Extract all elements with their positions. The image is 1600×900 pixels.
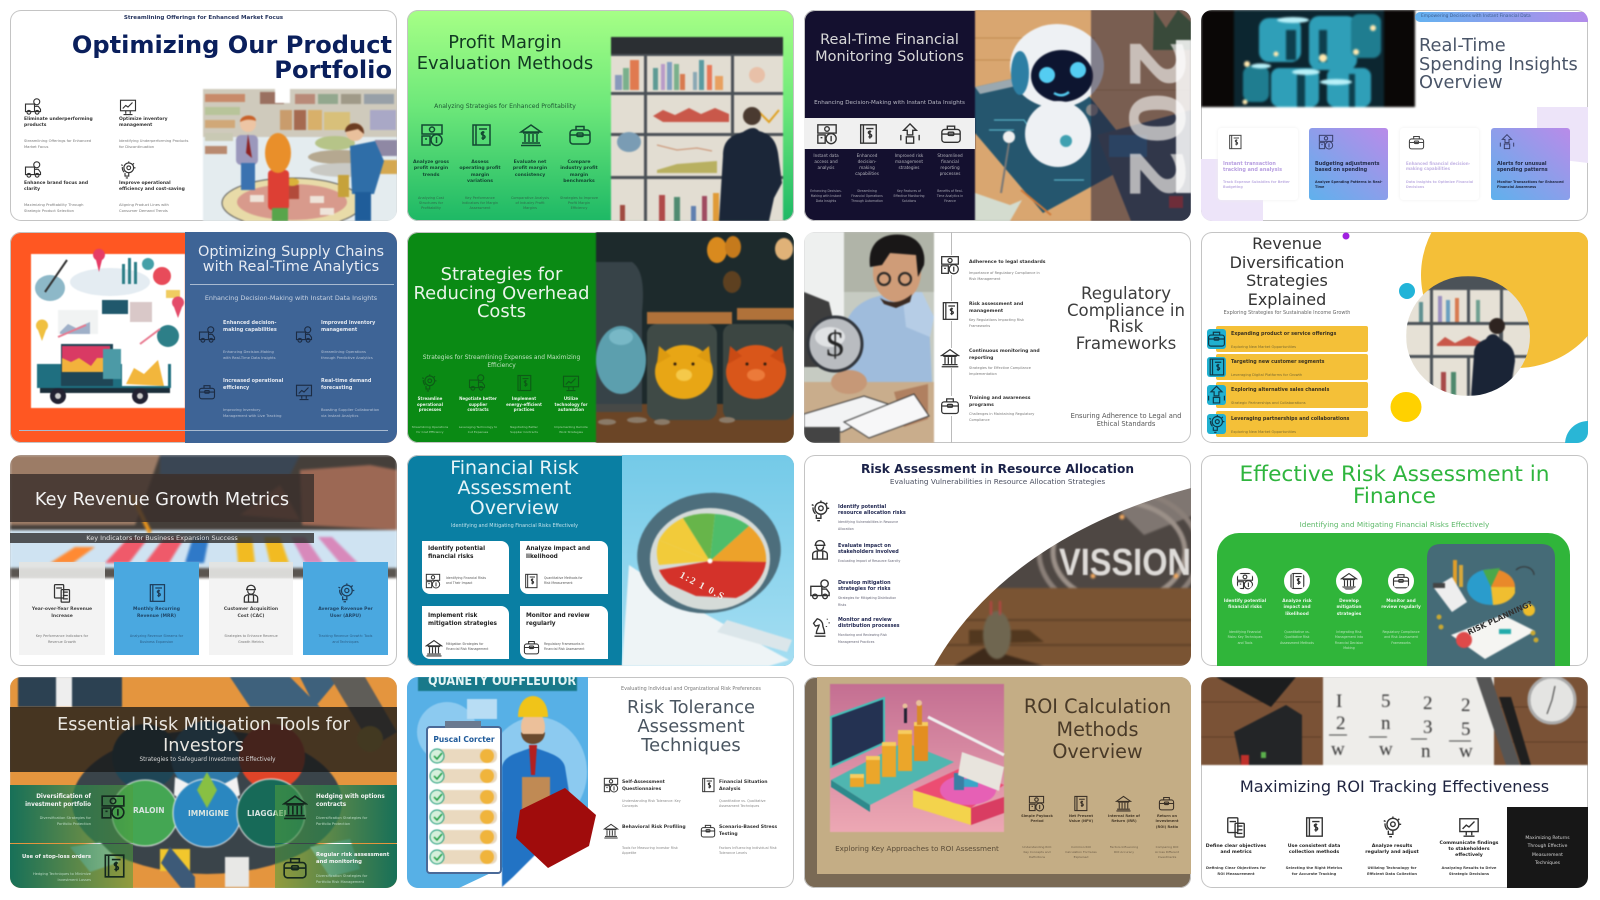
column labels: Streamline operational processes	[417, 396, 443, 412]
slide subtitle: Strategies to Safeguard Investments Effectively	[139, 757, 276, 763]
illustration: inspector with checklist	[407, 677, 596, 888]
list item 2: Leveraging Digital Platforms for Growth	[1231, 373, 1302, 377]
column labels: Internal Rate of Return (IRR)	[1108, 814, 1140, 823]
column labels: Leveraging Technology to Cut Expenses	[459, 425, 497, 434]
item: stakeholder impact: Evaluating Impact of Resource Scarcity	[838, 559, 900, 563]
card: alerts: Alerts for unusual spending patterns	[1497, 161, 1548, 173]
panel: financial monitoring slide	[804, 10, 1191, 221]
risk card 3: Implement risk mitigation strategies	[428, 613, 497, 627]
risk card 4	[520, 606, 608, 659]
risk card 3	[422, 606, 509, 659]
image: glowing glass jars	[1201, 10, 1417, 109]
column labels: Defining Clear Objectives for ROI Measurement	[1206, 866, 1266, 876]
column labels	[412, 396, 588, 434]
image: desk with calculator and handwritten figures: I	[1336, 691, 1342, 712]
image: desk with calculator and handwritten figures: 3	[1423, 717, 1432, 738]
technique: self assessment	[604, 778, 681, 808]
column labels: Identifying Financial Risks: Key Techniques and Tools	[1228, 630, 1262, 645]
item: brand focus: Enhance brand focus and clarity	[24, 181, 88, 192]
item: optimize inventory: Identifying Underperforming Products for Discontinuation	[119, 139, 188, 148]
item: monitoring	[940, 348, 1040, 376]
item: decision making: Enhancing Decision-Making with Real-Time Data Insights	[223, 350, 276, 360]
slide subtitle: Identifying and Mitigating Financial Risks Effectively	[1300, 520, 1489, 529]
item: training: Training and awareness programs	[969, 396, 1031, 408]
item: efficiency	[198, 378, 283, 418]
metric card: MRR: Monthly Recurring Revenue (MRR)	[133, 607, 180, 619]
column labels: Selecting the Right Metrics for Accurate Tracking	[1286, 866, 1342, 876]
list item 4: Leveraging partnerships and collaborations	[1231, 417, 1349, 422]
column labels: Streamlining Operations for Cost Efficiency	[412, 425, 448, 434]
slide title: Profit Margin Evaluation Methods	[417, 32, 593, 74]
slide title: Risk Assessment in Resource Allocation	[861, 462, 1134, 476]
title band	[10, 474, 314, 522]
slide title: Optimizing Supply Chains with Real-Time Analytics	[198, 244, 384, 275]
illustration: inspector with checklist: Puscal Corcter	[433, 735, 495, 744]
list item 1: Exploring New Market Opportunities	[1231, 345, 1296, 349]
column labels: Communicate findings to stakeholders effectively	[1440, 841, 1498, 858]
column labels: Define clear objectives and metrics	[1206, 844, 1266, 855]
metric card: MRR: Analyzing Revenue Streams for Business Expansion	[130, 634, 183, 644]
image: risk gauge under lens: 1:2 1 0.S	[678, 570, 727, 603]
metric card: ARPU	[303, 562, 388, 655]
metric card: YoY revenue: Key Performance Indicators for Revenue Growth	[36, 634, 88, 644]
panel: spending insights slide	[1201, 10, 1588, 221]
item: risk assessment: Risk assessment and management	[969, 302, 1023, 314]
slide subtitle: Exploring Key Approaches to ROI Assessment	[835, 844, 999, 853]
card: instant tracking: Instant transaction tracking and analysis	[1223, 161, 1282, 173]
image: desk with calculator and handwritten figures: n	[1421, 741, 1431, 762]
image: piggy banks in jars	[595, 232, 794, 443]
risk card 1: Identifying Financial Risks and Their Impact	[446, 576, 486, 585]
timeline divider	[951, 232, 952, 443]
blue text panel	[185, 232, 397, 443]
item: brand focus: Maximizing Profitability Through Strategic Product Selection	[24, 203, 83, 212]
slide subtitle: Identifying and Mitigating Financial Risks Effectively	[451, 523, 578, 529]
card: alerts: Monitor Transactions for Enhanced Financial Awareness	[1497, 180, 1564, 189]
subtitle pill: Empowering Decisions with Instant Financial Data	[1421, 14, 1531, 19]
list item 1	[1216, 326, 1368, 352]
tool: regular assessment	[275, 844, 397, 888]
column labels	[413, 160, 598, 210]
column labels: Use consistent data collection methods	[1288, 844, 1340, 855]
card: budgeting adjustments: Budgeting adjustments based on spending	[1315, 161, 1380, 173]
tool: hedging	[275, 785, 397, 843]
card: budgeting adjustments	[1309, 128, 1388, 200]
column labels: Common ROI Calculation Formulas Explained	[1065, 845, 1097, 859]
panel: profit margin slide	[407, 10, 794, 221]
technique: stress testing: Scenario-Based Stress Testing	[719, 825, 777, 837]
image: desk with calculator and handwritten figures: w	[1331, 739, 1345, 760]
item: monitoring: Strategies for Effective Compliance Implementation	[969, 366, 1031, 376]
tool: hedging: Hedging with options contracts	[316, 794, 385, 808]
item: identify risks	[812, 500, 906, 531]
subtitle band	[10, 533, 314, 543]
metric card: ARPU: Average Revenue Per User (ARPU)	[318, 607, 373, 619]
item: inventory	[296, 320, 376, 360]
slide title: ROI Calculation Methods Overview	[1024, 695, 1171, 763]
item: legal standards: Adherence to legal standards	[969, 260, 1046, 265]
item: inventory: Streamlining Operations through Predictive Analytics	[321, 350, 373, 360]
venn labels	[133, 806, 287, 818]
image: analyst at chart wall	[610, 36, 784, 221]
technique: financial situation	[702, 778, 768, 808]
card: instant tracking	[1218, 128, 1298, 200]
black sidebar	[1507, 807, 1588, 888]
panel: overhead costs slide	[407, 232, 794, 443]
top subtitle: Evaluating Individual and Organizational Risk Preferences	[621, 686, 761, 692]
metric card: MRR	[114, 562, 199, 655]
item: mitigation strategies: Strategies for Mitigating Distribution Risks	[838, 596, 896, 607]
image: logistics illustration	[30, 248, 185, 409]
item: identify risks: Identifying Vulnerabilities in Resource Allocation	[838, 520, 898, 531]
item: monitor distribution: Monitor and review distribution processes	[838, 617, 900, 629]
item: training: Challenges in Maintaining Regulatory Compliance	[969, 412, 1034, 422]
column labels: Utilizing Technology for Efficient Data Collection	[1367, 866, 1417, 876]
subtitle pill	[1415, 12, 1588, 22]
venn labels: RALOIN	[133, 806, 165, 815]
column labels: Strategies to Improve Profit Margin Efficiency	[560, 196, 598, 210]
venn labels: LIAGGAEI	[247, 809, 287, 818]
item: decision making	[198, 320, 277, 360]
column labels	[1224, 598, 1421, 650]
slide title: Maximizing ROI Tracking Effectiveness	[1240, 777, 1549, 796]
item: inventory: Improved inventory management	[321, 320, 375, 333]
item: eliminate products: Streamlining Offerings for Enhanced Market Focus	[24, 139, 91, 148]
slide title: Real-Time Spending Insights Overview	[1419, 35, 1578, 93]
image: meeting table with venn diagram	[10, 677, 397, 888]
panel: supply chains slide	[10, 232, 397, 443]
list item 4	[1216, 411, 1368, 437]
column labels: Utilize technology for automation	[555, 396, 587, 412]
panel: risk tolerance slide	[407, 677, 794, 888]
risk card 1	[422, 541, 509, 594]
column labels: Analyze risk impact and likelihood	[1282, 599, 1312, 617]
item: operational efficiency: Aligning Product Lines with Consumer Demand Trends	[119, 203, 169, 212]
list item 3: Strategic Partnerships and Collaborations	[1231, 401, 1306, 405]
image: vision wall and wooden desk	[934, 488, 1191, 666]
panel: effective risk assessment slide	[1201, 455, 1588, 666]
item: stakeholder impact: Evaluate impact on stakeholders involved	[838, 543, 899, 555]
column labels: Streamlined financial reporting processes	[937, 153, 963, 176]
column labels: Analyzing Cost Structures for Profitability	[418, 196, 444, 210]
technique: financial situation: Financial Situation Analysis	[719, 780, 768, 792]
column labels: Enhanced decision- making capabilities	[855, 153, 879, 176]
subtitle band: Key Indicators for Business Expansion Success	[86, 534, 238, 542]
risk card 2: Quantitative Methods for Risk Measurement	[544, 576, 583, 585]
technique: self assessment: Understanding Risk Tolerance: Key Concepts	[622, 799, 681, 808]
card: enhanced decisions	[1400, 128, 1479, 200]
column labels: Return on Investment (ROI) Ratio	[1156, 814, 1178, 829]
image: desk with calculator and handwritten figures: w	[1379, 739, 1393, 760]
icon row	[421, 124, 591, 146]
item: efficiency: Improving Inventory Management with Live Tracking	[223, 408, 282, 418]
image: analyst with magnifier: $	[826, 324, 844, 364]
column labels: Comparing ROI Across Different Investments	[1155, 845, 1179, 859]
panel: resource allocation slide	[804, 455, 1191, 666]
metric card: CAC: Strategies to Enhance Revenue Growth Metrics	[224, 634, 278, 644]
item: operational efficiency: Improve operational efficiency and cost-saving	[119, 181, 185, 192]
list item 3: Exploring alternative sales channels	[1231, 388, 1329, 393]
tan background panel	[817, 677, 1191, 874]
item: demand forecasting: Real-time demand forecasting	[321, 378, 371, 391]
panel: financial risk overview slide	[407, 455, 794, 666]
column labels: Regulatory Compliance and Risk Assessment Frameworks	[1382, 630, 1420, 645]
slide subtitle: Ensuring Adherence to Legal and Ethical Standards	[1071, 412, 1181, 428]
item: mitigation strategies	[810, 579, 896, 607]
item: monitoring: Continuous monitoring and reporting	[969, 349, 1040, 361]
slide title: Risk Tolerance Assessment Techniques	[627, 697, 755, 756]
image: risk gauge under lens	[621, 455, 794, 666]
decorative blobs	[1201, 107, 1588, 221]
card: alerts	[1491, 128, 1570, 200]
column labels: Implementing Remote Work Strategies	[554, 425, 588, 434]
metric card: ARPU: Tracking Revenue Growth: Tools and Techniques	[319, 634, 372, 644]
slide title: Financial Risk Assessment Overview	[450, 457, 579, 519]
column labels: Evaluate net profit margin consistency	[513, 160, 547, 178]
column labels: Integrating Risk Management into Financial Decision Making	[1335, 630, 1363, 650]
tool: hedging: Diversification Strategies for Portfolio Protection	[316, 816, 367, 826]
item: training	[941, 396, 1034, 422]
metric card: CAC: Customer Acquisition Cost (CAC)	[224, 607, 278, 619]
item: decision making: Enhanced decision- making capabilities	[223, 320, 277, 333]
technique: self assessment: Self-Assessment Questionnaires	[622, 780, 665, 792]
tool: stop-loss	[10, 844, 133, 888]
column labels: Quantitative vs. Qualitative Risk Assessment Methods	[1280, 630, 1314, 645]
item: legal standards	[941, 255, 1046, 281]
slide subtitle: Strategies for Streamlining Expenses and Maximizing Efficiency	[423, 355, 580, 369]
column labels: Comparative Analysis of Industry Profit Margins	[511, 196, 549, 210]
slide subtitle: Exploring Strategies for Sustainable Income Growth	[1224, 310, 1350, 316]
title band: Key Revenue Growth Metrics	[35, 490, 289, 510]
image: risk planning desk	[1427, 544, 1555, 666]
column labels: Simple Payback Period	[1021, 814, 1053, 823]
column labels: Negotiating Better Supplier Contracts	[510, 425, 538, 434]
technique: financial situation: Quantitative vs. Qualitative Assessment Techniques	[719, 799, 766, 808]
slide subtitle: Streamlining Offerings for Enhanced Market Focus	[124, 15, 283, 21]
tool: diversification: Diversification Strategies for Portfolio Protection	[40, 816, 91, 826]
image: isometric chart with climbers	[804, 677, 1191, 888]
slide title: Effective Risk Assessment in Finance	[1239, 462, 1550, 509]
item: identify risks: Identify potential resource allocation risks	[838, 504, 906, 516]
risk card 4: Regulatory Frameworks in Financial Risk Assessment	[544, 642, 584, 651]
slide title: Real-Time Financial Monitoring Solutions	[815, 32, 964, 65]
item: demand forecasting: Boosting Supplier Collaboration via Instant Analytics	[321, 408, 379, 418]
image: desk with calculator and handwritten figures: 5	[1381, 691, 1390, 712]
item: monitor distribution: Monitoring and Reviewing Risk Management Practices	[838, 633, 887, 644]
list item 3	[1216, 382, 1368, 408]
column labels: Implement energy-efficient practices	[506, 396, 542, 412]
image: analyst with magnifier	[804, 232, 935, 443]
metric card: YoY revenue: Year-over-Year Revenue Increase	[32, 607, 92, 619]
image: desk with calculator and handwritten figures: w	[1459, 741, 1473, 762]
image: desk with calculator and handwritten figures: 2	[1461, 695, 1470, 716]
column labels: Negotiate better supplier contracts	[459, 396, 497, 412]
column labels: Instant data access and analysis	[813, 153, 839, 170]
icon circles	[1232, 568, 1414, 594]
image: desk with calculator and handwritten figures: 2	[1336, 713, 1346, 734]
column labels: Understanding ROI: Key Concepts and Definitions	[1022, 845, 1052, 859]
list item 2	[1216, 354, 1368, 380]
slide subtitle: Evaluating Vulnerabilities in Resource Allocation Strategies	[890, 477, 1105, 486]
item: risk assessment	[942, 301, 1024, 328]
venn labels: IMMIGINE	[188, 809, 229, 818]
tool: diversification: Diversification of investment portfolio	[25, 794, 91, 808]
column labels: Key Features of Effective Monitoring Solutions	[893, 189, 925, 203]
panel: revenue diversification slide	[1201, 232, 1588, 443]
slide subtitle: Enhancing Decision-Making with Instant Data Insights	[814, 100, 965, 106]
item: mitigation strategies: Develop mitigation strategies for risks	[838, 580, 891, 592]
column labels	[1201, 841, 1507, 887]
technique: behavioral profiling: Behavioral Risk Profiling	[622, 825, 686, 830]
item: operational efficiency	[119, 161, 185, 212]
panel: revenue metrics slide	[10, 455, 397, 666]
item: optimize inventory: Optimize inventory management	[119, 117, 168, 128]
icon band	[804, 118, 975, 149]
risk card 2	[520, 541, 608, 594]
panel: risk mitigation tools slide	[10, 677, 397, 888]
icon row	[1201, 814, 1507, 838]
image: desk with calculator and handwritten figures	[1201, 677, 1588, 888]
slide title: Regulatory Compliance in Risk Frameworks	[1067, 284, 1185, 353]
image: risk planning desk: RISK PLANNING?	[1466, 599, 1534, 637]
column labels: Improved risk management strategies	[895, 153, 923, 170]
column labels: Monitor and review regularly	[1381, 599, 1421, 610]
black sidebar: Maximizing Returns Through Effective Measurement Techniques	[1525, 836, 1570, 866]
technique: stress testing: Factors Influencing Individual Risk Tolerance Levels	[719, 846, 777, 855]
column labels: Analyze gross profit margin trends	[413, 160, 449, 178]
column labels: Develop mitigation strategies	[1336, 599, 1362, 617]
column labels: Analyze results regularly and adjust	[1365, 844, 1419, 855]
tool: diversification	[10, 785, 133, 843]
list item 1: Expanding product or service offerings	[1231, 332, 1336, 337]
list item 4: Exploring New Market Opportunities	[1231, 430, 1296, 434]
column labels: Assess operating profit margin variations	[459, 160, 501, 184]
image: desk with calculator and handwritten figures: 5	[1461, 719, 1470, 740]
image: robot on tablet	[974, 10, 1191, 221]
card: instant tracking: Track Expense Subsidies for Better Budgeting	[1223, 180, 1290, 189]
risk card 4: Monitor and review regularly	[526, 613, 590, 627]
column labels: Identify potential financial risks	[1224, 599, 1266, 610]
column labels: Key Performance Indicators for Margin Assessment	[462, 196, 498, 210]
slide subtitle: Enhancing Decision-Making with Instant Data Insights	[205, 294, 377, 302]
panel: product portfolio slide	[10, 10, 397, 221]
item: brand focus	[24, 161, 88, 212]
green panel	[1217, 533, 1570, 666]
technique: behavioral profiling: Tools for Measuring Investor Risk Appetite	[622, 846, 678, 855]
list item 2: Targeting new customer segments	[1231, 360, 1325, 365]
tool: regular assessment: Diversification Strategies for Portfolio Risk Management	[316, 874, 367, 884]
image: hand over chart	[10, 455, 397, 580]
card: budgeting adjustments: Analyze Spending Patterns in Real- Time	[1315, 180, 1382, 189]
column labels: Benefits of Real- Time Analytics in Finance	[937, 189, 963, 203]
risk card 3: Mitigation Strategies for Financial Risk Management	[446, 642, 488, 651]
item: eliminate products: Eliminate underperforming products	[24, 117, 93, 128]
technique: stress testing	[700, 824, 777, 855]
column labels: Net Present Value (NPV)	[1069, 814, 1093, 823]
item: stakeholder impact	[812, 540, 900, 563]
item: optimize inventory	[119, 100, 188, 148]
slide title: Revenue Diversification Strategies Explained	[1230, 234, 1344, 308]
column labels: Compare industry profit margin benchmarks	[560, 160, 598, 184]
title band	[10, 707, 397, 772]
icon row	[422, 374, 579, 392]
tool: stop-loss: Use of stop-loss orders	[22, 854, 91, 860]
column labels: Analyzing Results to Drive Strategic Decisions	[1442, 866, 1496, 876]
item: eliminate products	[24, 98, 93, 148]
slide title: Essential Risk Mitigation Tools for Investors	[57, 715, 350, 756]
column labels	[1018, 814, 1191, 864]
risk card 1: Identify potential financial risks	[428, 546, 485, 560]
technique: behavioral profiling	[603, 824, 686, 855]
slide title: Strategies for Reducing Overhead Costs	[414, 264, 589, 322]
column labels: Factors Influencing ROI Accuracy	[1110, 845, 1138, 854]
slide title: Optimizing Our Product Portfolio	[72, 31, 392, 84]
column labels	[810, 153, 963, 203]
panel: regulatory compliance slide	[804, 232, 1191, 443]
risk card 2: Analyze impact and likelihood	[526, 546, 590, 560]
slide subtitle: Analyzing Strategies for Enhanced Profitability	[434, 103, 576, 110]
metric card: YoY revenue	[19, 562, 105, 655]
card: enhanced decisions: Data Insights to Optimize Financial Decisions	[1406, 180, 1473, 189]
image: desk with calculator and handwritten figures: n	[1381, 713, 1391, 734]
decorative shapes and analyst circle	[1342, 232, 1588, 443]
column labels: Enhancing Decision- Making with Instant Data Insights	[810, 189, 842, 203]
tool: stop-loss: Hedging Techniques to Minimize Investment Losses	[33, 872, 91, 882]
item: monitor distribution	[812, 617, 900, 644]
image: desk with calculator and handwritten figures: 2	[1423, 693, 1432, 714]
icon row	[1018, 795, 1188, 813]
illustration: supermarket cartoon	[202, 88, 397, 221]
item: demand forecasting	[296, 378, 379, 418]
metric card: CAC	[209, 562, 293, 655]
tool: regular assessment: Regular risk assessment and monitoring	[316, 852, 389, 865]
item: legal standards: Importance of Regulatory Compliance in Risk Management	[969, 271, 1040, 281]
item: risk assessment: Key Regulations Impacting Risk Frameworks	[969, 318, 1024, 328]
card: enhanced decisions: Enhanced financial decision- making capabilities	[1406, 161, 1470, 171]
panel: ROI calculation slide	[804, 677, 1191, 888]
panel: ROI tracking slide	[1201, 677, 1588, 888]
column labels: Streamlining Financial Operations Through Automation	[851, 189, 883, 203]
item: efficiency: Increased operational efficiency	[223, 378, 283, 391]
